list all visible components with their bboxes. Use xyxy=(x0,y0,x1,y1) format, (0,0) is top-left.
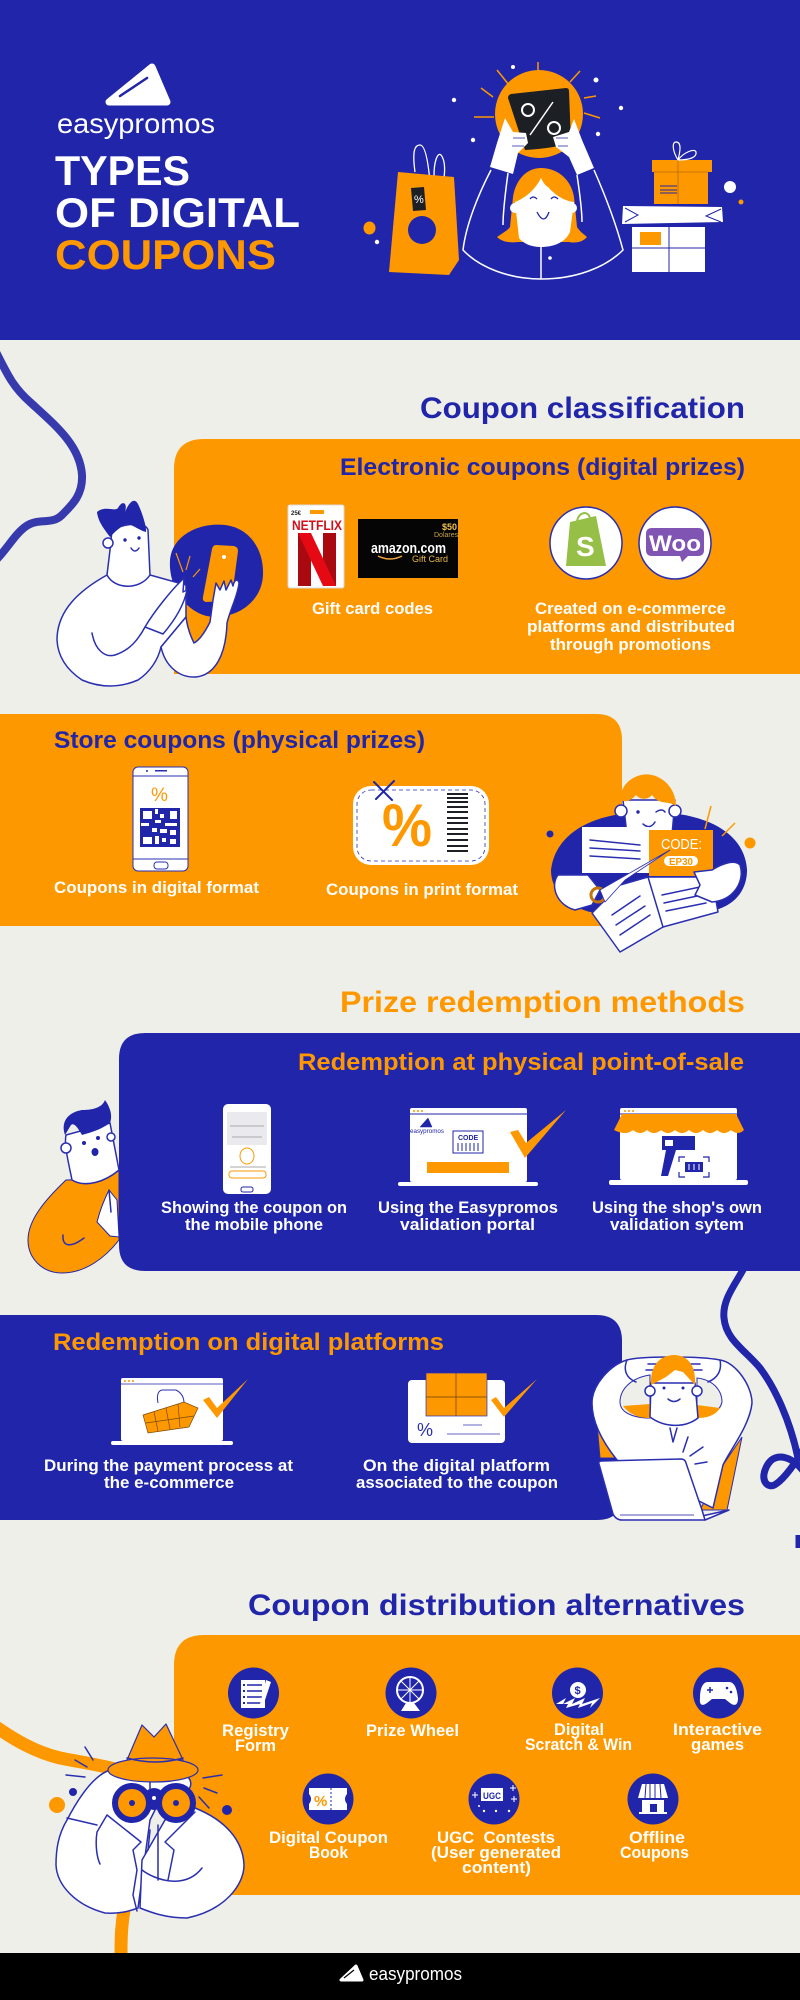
sub-heading: electronic coupons: Electronic coupons (digital prizes) xyxy=(340,454,745,481)
icon: phone with QR xyxy=(133,767,188,871)
head xyxy=(107,524,150,586)
labels: first row: Scratch & Win xyxy=(525,1735,632,1754)
labels: Using the Easypromos xyxy=(378,1198,558,1217)
title: OF DIGITAL xyxy=(55,189,300,236)
surprise marks and dots xyxy=(49,1747,232,1815)
labels: validation sytem xyxy=(610,1215,744,1234)
icon: shopify: S xyxy=(576,531,595,562)
labels: the e-commerce xyxy=(104,1473,234,1492)
shopping bag xyxy=(389,145,459,275)
hair xyxy=(651,1355,695,1385)
amazon gift card xyxy=(358,519,459,578)
title xyxy=(55,147,300,278)
orange sun circle xyxy=(495,70,583,158)
labels: second row: content) xyxy=(462,1858,531,1877)
illustration: man cutting coupon xyxy=(546,774,756,952)
coat right lobe xyxy=(140,1808,244,1918)
hair xyxy=(97,501,146,537)
label: e-commerce platforms: platforms and distributed xyxy=(527,617,735,636)
labels xyxy=(44,1456,558,1492)
decorative curved line: top left xyxy=(0,352,82,560)
labels: second row: (User generated xyxy=(431,1843,561,1862)
laptop xyxy=(599,1459,729,1520)
netflix gift card: NETFLIX xyxy=(292,517,343,533)
panel: distribution alternatives xyxy=(174,1635,800,1895)
panel: redemption at physical point-of-sale xyxy=(119,1033,800,1271)
icon: UGC contests xyxy=(468,1774,520,1824)
amazon gift card: Gift Card xyxy=(412,554,448,564)
labels: On the digital platform xyxy=(363,1456,550,1475)
labels: second row: Offline xyxy=(629,1828,685,1847)
labels: second row: UGC Contests xyxy=(437,1828,555,1847)
header band xyxy=(0,0,800,340)
body inner line xyxy=(92,627,145,656)
hands xyxy=(555,875,600,910)
icon: card with gift: % xyxy=(417,1420,433,1440)
labels: validation portal xyxy=(400,1215,535,1234)
labels: first row xyxy=(222,1720,762,1755)
labels xyxy=(161,1198,762,1234)
hat xyxy=(108,1724,198,1782)
icon: digital coupon book: % xyxy=(314,1793,327,1810)
labels: second row: Book xyxy=(309,1843,349,1862)
labels: first row: Interactive xyxy=(673,1720,762,1739)
shopping bag: % xyxy=(414,194,424,206)
head xyxy=(65,1123,119,1184)
panel: store coupons xyxy=(0,714,622,926)
labels: second row: Coupons xyxy=(620,1843,689,1862)
icon: laptop with validation portal: easypromos xyxy=(410,1129,444,1135)
icon: laptop with validation portal: CODE xyxy=(458,1135,479,1142)
decorative curved line: right xyxy=(724,1268,800,1548)
footer logo: easypromos xyxy=(369,1964,462,1984)
icon: woocommerce: Woo xyxy=(649,531,701,556)
face xyxy=(662,1386,707,1464)
amazon gift card: $50 xyxy=(442,522,457,532)
orange coupon half: code: CODE: xyxy=(661,836,702,853)
sub-heading: store coupons: Store coupons (physical prizes) xyxy=(54,727,425,754)
lower paper xyxy=(592,877,718,952)
hair xyxy=(621,774,676,806)
icon: laptop with validation portal xyxy=(398,1108,566,1186)
orange coupon half: code: EP30 xyxy=(669,857,693,868)
icon: prize wheel xyxy=(386,1668,436,1718)
decorative curved line: orange left xyxy=(0,1727,125,1955)
sub-heading: digital platforms: Redemption on digital platforms xyxy=(53,1329,444,1356)
labels: Showing the coupon on xyxy=(161,1198,347,1217)
scissors xyxy=(374,781,394,800)
amazon gift card: Dolares xyxy=(434,532,459,539)
title: TYPES xyxy=(55,147,190,194)
face xyxy=(123,536,141,551)
logo: easypromos xyxy=(57,67,215,139)
labels: associated to the coupon xyxy=(356,1473,558,1492)
left arm xyxy=(145,578,187,634)
labels: first row: Registry xyxy=(222,1721,290,1740)
footer bar xyxy=(0,1953,800,2000)
netflix gift card xyxy=(288,505,344,588)
hands and arms xyxy=(490,118,594,175)
icon: registry form xyxy=(228,1668,279,1718)
orange side panels xyxy=(597,1423,742,1510)
icon: digital coupon book xyxy=(302,1774,354,1824)
blue circle xyxy=(551,812,747,912)
label: e-commerce platforms xyxy=(527,599,735,654)
girl's head xyxy=(497,168,587,279)
icon: card with gift xyxy=(408,1373,537,1443)
icon: offline shop xyxy=(628,1774,678,1824)
panel: redemption on digital platforms xyxy=(0,1315,622,1520)
icon: cut-out coupon xyxy=(353,781,489,865)
body outline xyxy=(463,170,623,279)
white parcel stack xyxy=(622,206,723,272)
label: e-commerce platforms: through promotions xyxy=(550,635,711,654)
title: COUPONS xyxy=(55,231,276,278)
labels: the mobile phone xyxy=(185,1215,323,1234)
icon: digital scratch and win xyxy=(552,1668,603,1718)
icon: laptop storefront with scanner xyxy=(609,1108,748,1185)
label: coupons in print format: Coupons in print format xyxy=(326,880,518,899)
illustration: man peeking xyxy=(28,1100,119,1273)
labels: first row: Prize Wheel xyxy=(366,1721,459,1740)
accent dots xyxy=(364,181,744,234)
orange body xyxy=(28,1170,119,1273)
coat lapels and arm lines xyxy=(67,1812,202,1911)
labels: second row: Digital Coupon xyxy=(269,1828,388,1847)
label: e-commerce platforms: Created on e-commerce xyxy=(535,599,726,618)
hero illustration: shopper with coupon tablet, bag and boxes xyxy=(364,62,744,279)
head xyxy=(623,800,675,835)
body xyxy=(57,575,186,686)
arm openings xyxy=(620,1360,722,1418)
labels: Using the shop's own xyxy=(592,1198,762,1217)
orange coupon half: code xyxy=(649,830,713,876)
labels: first row: Digital xyxy=(554,1720,604,1739)
icon: laptop with basket xyxy=(111,1378,248,1445)
scissors xyxy=(591,850,670,902)
icon: woocommerce xyxy=(639,507,711,579)
icon: game controller xyxy=(693,1668,744,1718)
labels: During the payment process at xyxy=(44,1456,293,1475)
illustration: man holding phone xyxy=(57,501,263,686)
illustration: detective with binoculars xyxy=(49,1724,244,1918)
amazon gift card: amazon.com xyxy=(371,540,446,557)
illustration: relaxed man with laptop xyxy=(592,1355,752,1520)
icon: phone with QR: % xyxy=(151,785,168,806)
heading: Coupon classification: Coupon classification xyxy=(420,392,745,425)
face xyxy=(82,1136,100,1156)
hand xyxy=(97,1190,119,1237)
accent rays and dots xyxy=(546,806,756,848)
white coupon half xyxy=(582,827,649,873)
phone xyxy=(203,545,238,602)
icon: UGC contests: UGC xyxy=(483,1791,501,1802)
netflix gift card: 25€ xyxy=(291,511,302,517)
panel: electronic coupons xyxy=(174,439,800,674)
head side and ear xyxy=(150,1775,191,1795)
head xyxy=(650,1383,698,1425)
heading: prize redemption methods: Prize redemption methods xyxy=(340,986,745,1019)
blue circle behind phone xyxy=(170,525,263,617)
labels: first row: Form xyxy=(235,1736,276,1755)
gift box xyxy=(652,142,712,204)
hair xyxy=(64,1100,111,1135)
icon: shopify xyxy=(550,507,622,579)
face xyxy=(636,810,665,827)
labels: first row: games xyxy=(691,1735,744,1754)
coat left lobe and head xyxy=(56,1770,170,1913)
sub-heading: physical point-of-sale: Redemption at physical point-of-sale xyxy=(298,1049,744,1076)
label: gift card codes: Gift card codes xyxy=(312,599,433,618)
icon: coupon on phone xyxy=(223,1104,271,1194)
icon: cut-out coupon: % xyxy=(382,792,432,859)
logo: easypromos: easypromos xyxy=(57,108,215,139)
heading: coupon distribution alternatives: Coupon distribution alternatives xyxy=(248,1589,745,1622)
icon: digital scratch and win: $ xyxy=(574,1685,581,1697)
arms and torso xyxy=(592,1357,752,1508)
sun rays and sparkles xyxy=(375,62,623,260)
labels: second row xyxy=(269,1828,689,1877)
label: coupons in digital format: Coupons in digital format xyxy=(54,878,259,897)
binoculars xyxy=(115,1786,193,1820)
tablet with percent xyxy=(508,88,571,150)
right arm xyxy=(161,580,239,677)
